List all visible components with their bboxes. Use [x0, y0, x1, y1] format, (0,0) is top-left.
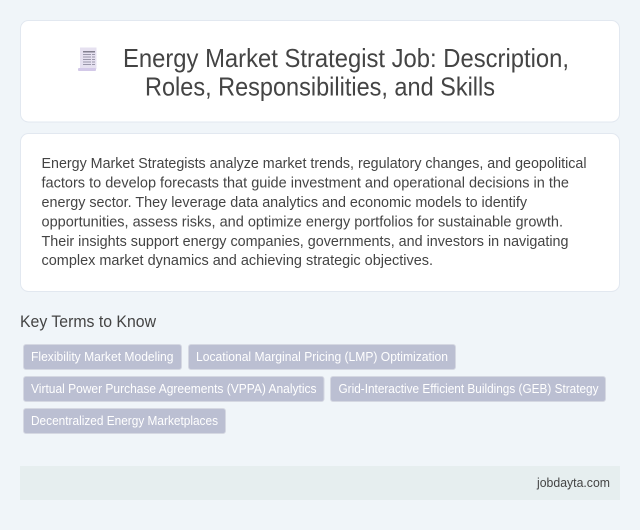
tag: grid-interactive efficient buildings: Grid-Interactive Efficient Buildings (GEB) Strategy — [338, 381, 599, 396]
title: Roles, Responsibilities, and Skills — [145, 74, 495, 102]
tag: flexibility market modeling: Flexibility Market Modeling — [31, 349, 174, 364]
description text: opportunities, assess risks, and optimize energy portfolios for sustainable growth. — [42, 214, 563, 230]
tag group: key terms — [24, 344, 606, 434]
icon: document scroll — [78, 48, 96, 71]
footer bar — [20, 466, 620, 500]
description text: complex market dynamics and achieving strategic objectives. — [42, 253, 433, 269]
description text: Energy Market Strategists analyze market trends, regulatory changes, and geopolitical — [42, 156, 586, 172]
tag: virtual power purchase agreements: Virtual Power Purchase Agreements (VPPA) Analytics — [31, 381, 316, 396]
tag: decentralized energy marketplaces: Decentralized Energy Marketplaces — [31, 413, 218, 428]
heading: key terms: Key Terms to Know — [20, 313, 156, 331]
title: Energy Market Strategist Job: Description, — [123, 45, 569, 73]
description text: Their insights support energy companies, governments, and investors in navigating — [42, 234, 568, 250]
tag: locational marginal pricing: Locational Marginal Pricing (LMP) Optimization — [196, 349, 448, 364]
panel: title card — [20, 20, 620, 122]
description text: factors to develop forecasts that guide investment and operational decisions in the — [42, 176, 569, 192]
tag: grid-interactive efficient buildings — [330, 376, 606, 402]
tag: flexibility market modeling — [24, 344, 182, 370]
footer source text: jobdayta.com — [536, 475, 610, 490]
description text: energy sector. They leverage data analytics and economic models to identify — [42, 195, 528, 211]
description text — [42, 156, 586, 269]
panel: description card — [20, 134, 620, 292]
tag: locational marginal pricing — [188, 344, 456, 370]
tag: decentralized energy marketplaces — [24, 408, 226, 434]
tag: virtual power purchase agreements — [24, 376, 324, 402]
title — [123, 45, 569, 102]
